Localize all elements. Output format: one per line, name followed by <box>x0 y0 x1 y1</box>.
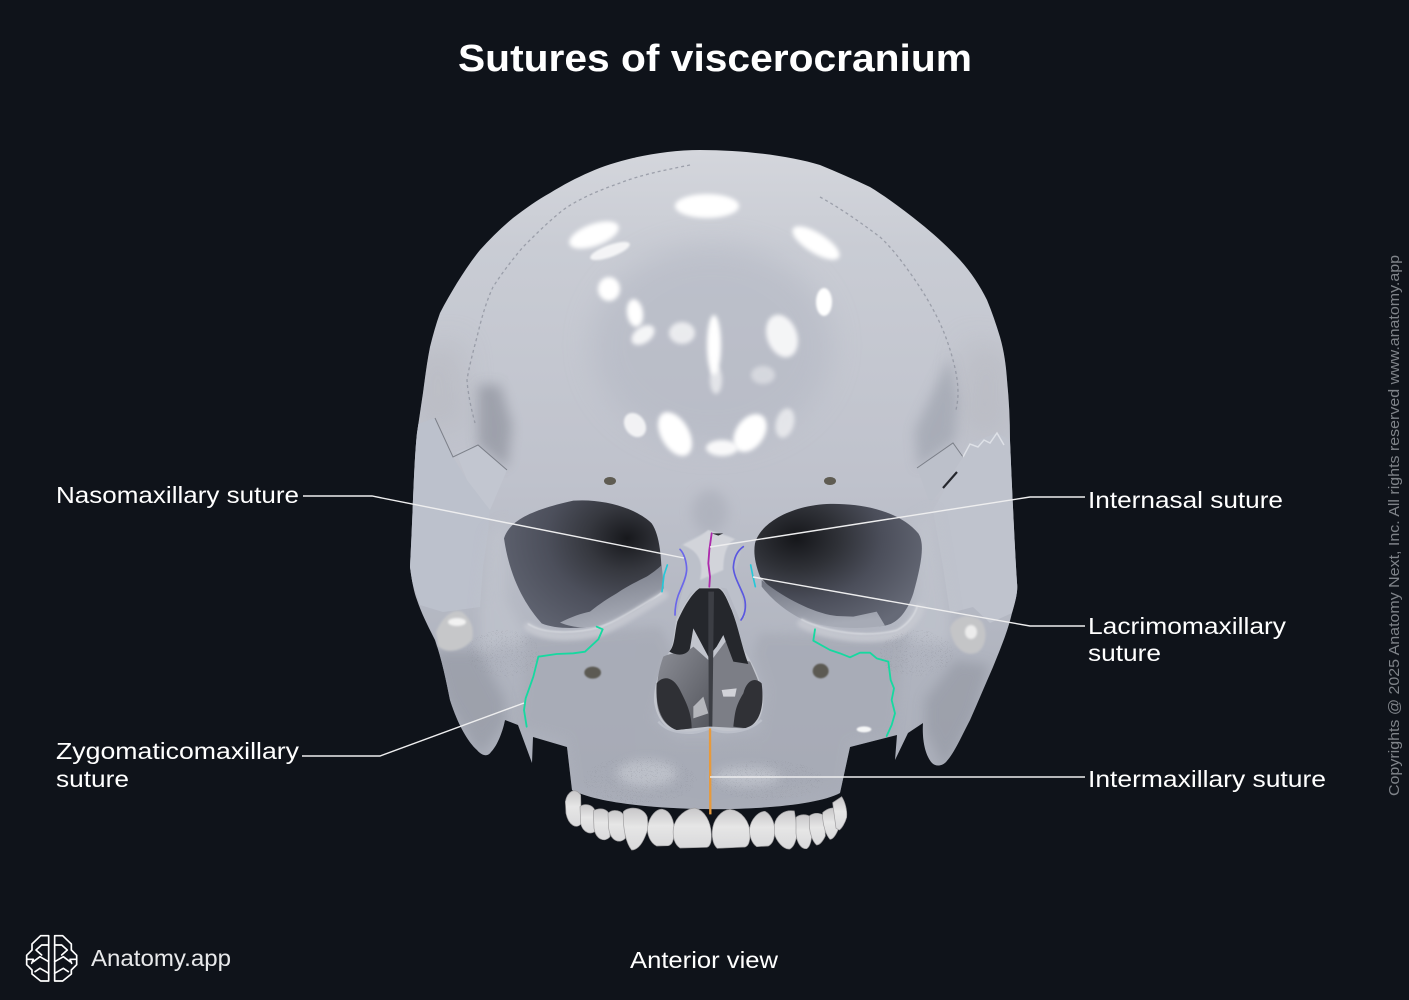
nasal septum <box>708 592 714 727</box>
right orbit <box>754 504 922 627</box>
forehead central tone <box>602 250 820 416</box>
teeth <box>565 791 847 850</box>
temporal fossa shadows <box>478 385 512 468</box>
label: lacrimomaxillary suture: Lacrimomaxillary <box>1088 613 1287 639</box>
nasal floor rim <box>658 720 762 733</box>
cheek and maxilla shading <box>520 627 907 813</box>
suture: zygomaticomaxillary <box>524 627 895 736</box>
coronal suture lines <box>467 165 958 423</box>
lateral frontal tones <box>419 354 454 418</box>
leader: lacrimomaxillary suture <box>753 577 1085 626</box>
left orbit <box>504 500 662 628</box>
label: zygomaticomaxillary suture: suture <box>56 766 129 792</box>
label: zygomaticomaxillary suture: Zygomaticomaxillary <box>56 738 300 764</box>
forehead specular highlights <box>566 194 844 462</box>
leader: internasal suture <box>710 497 1085 547</box>
orbit rim highlights <box>528 593 920 638</box>
left sphenoid <box>474 446 505 470</box>
glabella tone <box>695 493 725 530</box>
alveolar texture <box>617 760 780 787</box>
logo: brain icon <box>27 936 77 981</box>
label: intermaxillary suture: Intermaxillary suture <box>1088 766 1326 792</box>
label: nasomaxillary suture: Nasomaxillary suture <box>56 482 299 508</box>
label: internasal suture: Internasal suture <box>1088 487 1283 513</box>
suture: intermaxillary <box>706 728 714 814</box>
copyright: Copyrights @ 2025 Anatomy Next, Inc. All rights reserved www.anatomy.app <box>1387 255 1403 796</box>
nasal dark notch <box>712 533 723 536</box>
piriform aperture <box>654 587 763 734</box>
leader: intermaxillary suture <box>710 776 1085 778</box>
suture: internasal <box>708 533 712 587</box>
lower side shading <box>432 650 505 756</box>
temporal suture cracks <box>435 418 963 470</box>
side shading and temporal bones <box>408 245 1020 813</box>
right sphenoid <box>917 443 963 503</box>
right temporal squama <box>951 442 1018 623</box>
skull illustration <box>408 150 1020 850</box>
view caption: Anterior view <box>630 947 778 973</box>
label: zygomaticomaxillary suture <box>56 738 300 792</box>
title: Sutures of viscerocranium <box>458 38 972 80</box>
bone pores <box>467 630 953 803</box>
right orbit floor <box>762 580 885 628</box>
label: lacrimomaxillary suture: suture <box>1088 640 1161 666</box>
leader: zygomaticomaxillary suture <box>302 703 524 756</box>
label: lacrimomaxillary suture <box>1088 613 1287 666</box>
suture: lacrimomaxillary <box>662 565 755 592</box>
zygomatic-to-frontal highlight <box>484 590 518 645</box>
nasal cavity side recesses <box>656 678 692 730</box>
nasal cavity specular bits <box>693 697 708 718</box>
facial skeleton <box>467 500 953 850</box>
nasal bones <box>677 530 745 620</box>
nasal cavity upper dark <box>669 588 748 664</box>
suture: nasomaxillary <box>675 547 745 620</box>
supraorbital foramina <box>604 477 836 485</box>
nasal cavity lower chambers <box>657 647 708 730</box>
specular patch on right cheek <box>857 726 871 732</box>
logo: wordmark: Anatomy.app <box>91 945 231 971</box>
infraorbital foramina <box>584 664 829 679</box>
cranium silhouette <box>410 150 1017 809</box>
left orbit floor <box>560 565 664 627</box>
left temporal squama <box>410 424 474 612</box>
zygomatic processes <box>436 611 985 654</box>
leader: nasomaxillary suture <box>303 496 684 558</box>
